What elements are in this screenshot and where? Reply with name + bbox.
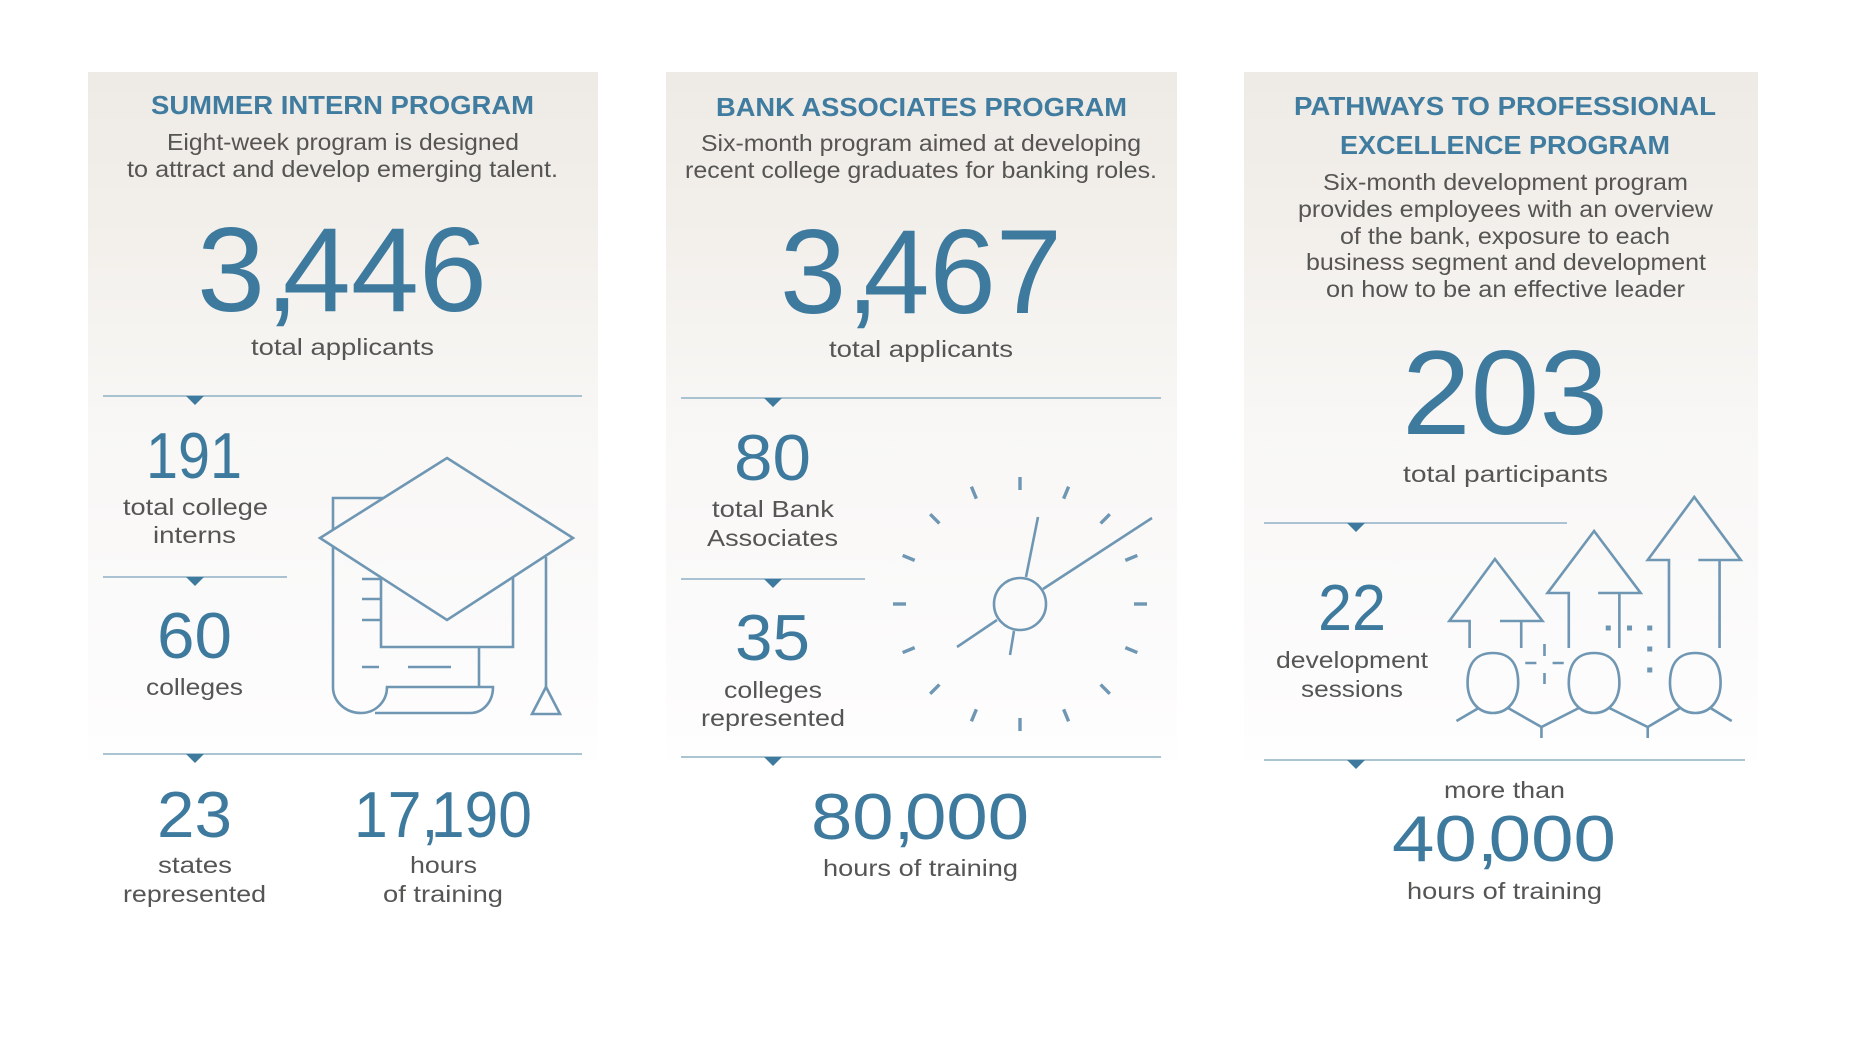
stat: college interns: total college — [123, 494, 268, 520]
panel background — [88, 72, 598, 760]
stat: college interns: interns — [153, 522, 236, 548]
stat: hours of training: hours — [410, 852, 477, 878]
stat: hours of training: of training — [383, 881, 503, 907]
description: provides employees with an overview — [1298, 196, 1713, 222]
stat: total participants: 203 — [1402, 326, 1608, 460]
stat: colleges represented: represented — [701, 705, 845, 731]
stat: total applicants: 3,467 — [780, 205, 1062, 339]
stat: total applicants: total applicants — [251, 334, 434, 360]
divider with pointer — [103, 577, 287, 586]
stat: more than 40,000 hours of training — [1392, 777, 1616, 904]
panel: bank associates program — [666, 72, 1177, 881]
stat: colleges represented: colleges — [724, 677, 822, 703]
heading: PATHWAYS TO PROFESSIONAL — [1294, 93, 1716, 121]
divider with pointer — [1264, 523, 1567, 532]
description: recent college graduates for banking roles. — [685, 157, 1157, 183]
heading: EXCELLENCE PROGRAM — [1340, 132, 1670, 160]
divider with pointer — [681, 579, 865, 588]
stat: colleges: colleges — [146, 674, 243, 700]
stat: more than 40,000 hours of training: more than — [1444, 777, 1565, 803]
panel background — [666, 72, 1177, 760]
stat: college interns: 191 — [146, 419, 242, 492]
icon: three people with rising arrows — [1449, 497, 1741, 738]
divider with pointer — [1264, 760, 1745, 769]
stat: development sessions: 22 — [1318, 571, 1386, 644]
stat: colleges: 60 — [157, 599, 232, 672]
panel: pathways to professional excellence program — [1244, 72, 1758, 904]
panel background — [1244, 72, 1758, 760]
description: Six-month development program — [1323, 169, 1688, 195]
description: to attract and develop emerging talent. — [127, 156, 558, 182]
stat: development sessions: development — [1276, 647, 1429, 673]
description — [685, 130, 1157, 183]
description: Six-month program aimed at developing — [701, 130, 1141, 156]
stat: total bank associates: 80 — [734, 421, 811, 494]
stat: hours of training — [811, 780, 1029, 881]
icon: clock — [893, 477, 1152, 731]
description — [1298, 169, 1713, 302]
description: business segment and development — [1306, 249, 1707, 275]
stat: total bank associates — [707, 421, 838, 551]
stat: colleges — [146, 599, 243, 700]
stat: college interns — [123, 419, 268, 548]
stat: total bank associates: Associates — [707, 525, 838, 551]
description — [127, 129, 558, 182]
divider with pointer — [681, 398, 1161, 407]
description: on how to be an effective leader — [1326, 276, 1685, 302]
stat: development sessions — [1276, 571, 1429, 702]
divider with pointer — [103, 754, 582, 763]
stat: total applicants: total applicants — [829, 336, 1013, 362]
stat: colleges represented: 35 — [735, 601, 810, 674]
stat: total applicants: 3,446 — [197, 203, 487, 337]
stat: states represented: states — [158, 852, 232, 878]
icon: graduation cap on diploma scroll — [320, 458, 573, 714]
stat: states represented — [123, 778, 266, 907]
stat: hours of training: hours of training — [823, 855, 1018, 881]
stat: hours of training — [354, 778, 532, 907]
panel: summer intern program — [88, 72, 598, 907]
heading — [1294, 93, 1716, 160]
stat: total bank associates: total Bank — [712, 496, 835, 522]
stat: total participants: total participants — [1403, 461, 1608, 487]
heading: SUMMER INTERN PROGRAM — [151, 92, 534, 120]
stat: states represented: 23 — [157, 778, 232, 851]
stat: hours of training: 17,190 — [354, 778, 532, 851]
heading: BANK ASSOCIATES PROGRAM — [716, 94, 1127, 122]
stat: colleges represented — [701, 601, 845, 731]
description: of the bank, exposure to each — [1340, 223, 1670, 249]
divider with pointer — [681, 757, 1161, 766]
stat: more than 40,000 hours of training: hours of training — [1407, 878, 1602, 904]
stat: more than 40,000 hours of training: 40,000 — [1392, 802, 1616, 875]
divider with pointer — [103, 396, 582, 405]
description: Eight-week program is designed — [167, 129, 519, 155]
stat: development sessions: sessions — [1301, 676, 1403, 702]
stat: states represented: represented — [123, 881, 266, 907]
stat: hours of training: 80,000 — [811, 780, 1029, 853]
